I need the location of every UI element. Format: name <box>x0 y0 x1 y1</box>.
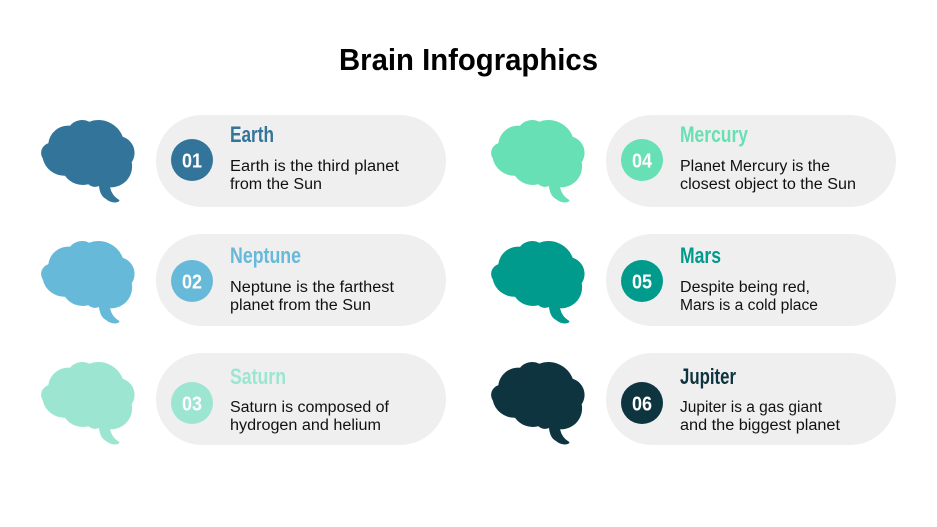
pill background <box>156 234 446 326</box>
number badge 04 <box>621 139 663 181</box>
description: Neptune is the farthest <box>230 279 395 296</box>
heading: Mercury <box>680 122 749 147</box>
pill background <box>606 353 896 445</box>
panel: Mars <box>491 234 896 326</box>
number badge 06: 06 <box>632 394 652 416</box>
number badge 05: 05 <box>632 272 652 294</box>
description: hydrogen and helium <box>230 417 381 434</box>
icon: brain Jupiter <box>491 362 585 444</box>
pill background <box>156 115 446 207</box>
number badge 05 <box>621 260 663 302</box>
icon: brain Neptune <box>41 241 135 324</box>
heading: Jupiter <box>680 364 736 389</box>
description: and the biggest planet <box>680 417 841 434</box>
number badge 01 <box>171 139 213 181</box>
description: planet from the Sun <box>230 297 371 314</box>
number badge 03 <box>171 382 213 424</box>
heading: Earth <box>230 122 274 147</box>
description: from the Sun <box>230 176 322 193</box>
heading: Mars <box>680 243 721 268</box>
number badge 02: 02 <box>182 272 202 294</box>
description: Mars is a cold place <box>680 297 818 314</box>
icon: brain Earth <box>41 120 135 202</box>
number badge 06 <box>621 382 663 424</box>
number badge 03: 03 <box>182 394 202 416</box>
icon: brain Saturn <box>41 362 135 444</box>
panel: Neptune <box>41 234 446 326</box>
number badge 01: 01 <box>182 150 202 172</box>
heading: Neptune <box>230 243 301 268</box>
panel: Jupiter <box>491 353 896 445</box>
description: Saturn is composed of <box>230 399 390 416</box>
pill background <box>156 353 446 445</box>
pill background <box>606 115 896 207</box>
icon: brain Mercury <box>491 120 585 202</box>
description: closest object to the Sun <box>680 176 856 193</box>
description: Jupiter is a gas giant <box>680 399 823 416</box>
title: Brain Infographics <box>339 42 598 77</box>
description: Earth is the third planet <box>230 158 400 175</box>
number badge 04: 04 <box>632 150 653 172</box>
panel: Earth <box>41 115 446 207</box>
icon: brain Mars <box>491 241 585 324</box>
description: Planet Mercury is the <box>680 158 830 175</box>
description: Despite being red, <box>680 279 810 296</box>
pill background <box>606 234 896 326</box>
number badge 02 <box>171 260 213 302</box>
panel: Saturn <box>41 353 446 445</box>
heading: Saturn <box>230 364 286 389</box>
panel: Mercury <box>491 115 896 207</box>
